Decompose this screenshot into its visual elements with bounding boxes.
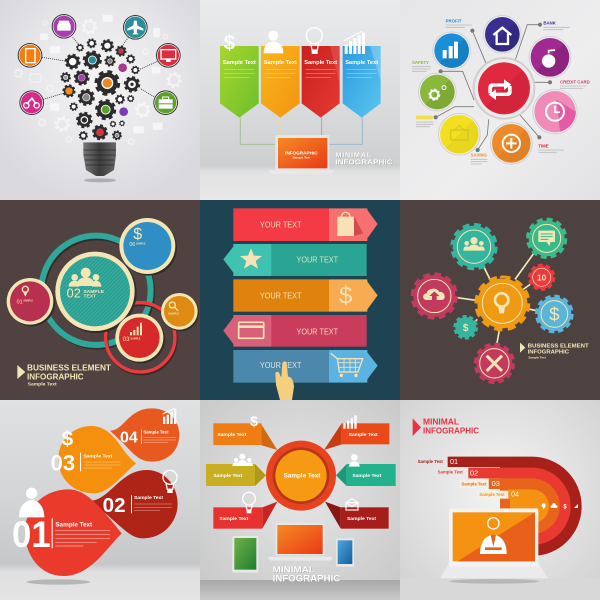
phone bbox=[336, 538, 354, 567]
title: MINIMAL bbox=[423, 418, 459, 427]
banner: orange bbox=[261, 46, 300, 118]
circle: bomb bbox=[529, 36, 571, 79]
laptop: INFOGRAPHIC bbox=[285, 150, 318, 155]
gear: cloud bbox=[413, 275, 456, 317]
title block: Sample Text bbox=[528, 355, 546, 359]
labels: SAFETY bbox=[412, 60, 429, 65]
panel: laptop with bands: Sample Text bbox=[461, 481, 487, 486]
banner: green bbox=[220, 46, 259, 118]
icon: monitor bbox=[156, 43, 181, 68]
drop 04 bbox=[110, 408, 179, 462]
gear: bulb center bbox=[477, 278, 528, 329]
center circle bbox=[473, 57, 535, 120]
title block: BUSINESS ELEMENT bbox=[528, 343, 589, 349]
connector lines bbox=[455, 252, 538, 345]
bar 5 blue bbox=[233, 350, 378, 383]
step 02 text: Sample Text bbox=[134, 495, 163, 501]
panel: business element rings bbox=[0, 200, 200, 400]
circle 06 blue: SAMPLE bbox=[136, 242, 146, 245]
icon: dollar: $ bbox=[250, 413, 258, 429]
laptop bbox=[440, 508, 548, 578]
red ring bbox=[106, 303, 176, 374]
band icons bbox=[542, 503, 578, 510]
circle: clock bbox=[532, 89, 578, 134]
concentric bands bbox=[448, 457, 582, 556]
icon: person bbox=[349, 454, 360, 467]
teal ring bbox=[41, 236, 152, 347]
title bbox=[335, 150, 393, 167]
icon: car bbox=[52, 14, 76, 39]
step 03 text: Sample Text bbox=[83, 453, 113, 459]
icon: bike bbox=[19, 90, 44, 115]
circle 03 red: 03 bbox=[123, 336, 130, 343]
circle 06 blue bbox=[119, 218, 177, 276]
icon: phone bbox=[18, 43, 42, 68]
callout: top right: Sample Text bbox=[349, 432, 378, 438]
hub circle bbox=[266, 441, 336, 511]
band labels: 04 bbox=[511, 489, 519, 498]
title bbox=[273, 565, 341, 584]
band labels: 02 bbox=[470, 468, 478, 477]
circle orange: SAMPLE bbox=[168, 311, 179, 315]
tablet bbox=[232, 536, 258, 573]
title: MINIMAL bbox=[273, 565, 315, 574]
banner: orange: Sample Text bbox=[264, 60, 297, 66]
gear: red badge bbox=[530, 265, 554, 289]
icon: bulb bbox=[243, 492, 255, 513]
circle 06 blue: 06 bbox=[129, 242, 135, 248]
bar 4 pink: YOUR TEXT bbox=[296, 328, 338, 337]
icon: person bbox=[19, 488, 44, 517]
icon: briefcase bbox=[153, 90, 178, 115]
leader lines bbox=[434, 23, 552, 152]
title block: BUSINESS ELEMENT bbox=[27, 363, 111, 373]
circle: gears bbox=[418, 73, 457, 111]
circle 03 red: SAMPLE bbox=[131, 337, 141, 340]
faint background gears and icons bbox=[14, 15, 181, 145]
labels: PROFIT bbox=[446, 19, 462, 24]
labels: SAVING bbox=[471, 153, 488, 158]
callout: bottom right bbox=[325, 502, 389, 529]
gear: message bbox=[528, 220, 565, 257]
icon: bulb bbox=[163, 470, 177, 493]
icon: people bbox=[232, 454, 253, 466]
icon: bar chart bbox=[163, 408, 176, 424]
circle: plus bbox=[490, 122, 533, 165]
icon: dollar: $ bbox=[62, 428, 74, 451]
callout: middle left bbox=[206, 464, 266, 486]
band labels: 03 bbox=[492, 479, 500, 488]
icon: bar chart bbox=[344, 31, 365, 54]
panel: gear network bbox=[400, 200, 600, 400]
step 04 text: Sample Text bbox=[143, 429, 169, 434]
icon: dollar: $ bbox=[224, 31, 236, 54]
gear: red badge: 10 bbox=[537, 272, 547, 282]
gear: small teal bbox=[455, 317, 476, 338]
panel: four banners and laptop bbox=[200, 0, 400, 200]
callout: bottom left bbox=[213, 502, 277, 529]
label backgrounds bbox=[459, 480, 508, 499]
gear: small teal: $ bbox=[463, 323, 469, 334]
hub circle: Sample Text bbox=[284, 473, 321, 480]
laptop: Sample Text bbox=[293, 156, 310, 160]
callout: bottom left: Sample Text bbox=[219, 516, 249, 522]
callout: middle right: Sample Text bbox=[352, 473, 382, 479]
bar 2 teal bbox=[223, 244, 367, 276]
circle 06 blue: $ bbox=[133, 226, 142, 243]
title: INFOGRAPHIC bbox=[423, 427, 479, 436]
circle 02: SAMPLE bbox=[83, 289, 105, 295]
icon: bulb bbox=[306, 28, 322, 54]
labels bbox=[412, 19, 590, 164]
title: INFOGRAPHIC bbox=[273, 574, 341, 584]
title bbox=[413, 418, 479, 436]
step 04 text: 04 bbox=[120, 430, 138, 447]
title block: INFOGRAPHIC bbox=[528, 349, 569, 355]
gear: people bbox=[453, 225, 495, 268]
bulb gears bbox=[61, 39, 139, 140]
title block bbox=[520, 343, 589, 359]
circle 02: TEXT bbox=[83, 294, 96, 300]
callout: middle right bbox=[336, 464, 396, 486]
title block: Sample Text bbox=[28, 382, 57, 388]
panel: teardrop steps bbox=[0, 400, 200, 600]
hand pointer bbox=[275, 361, 294, 400]
panel: laptop with bands: Sample Text bbox=[438, 470, 463, 475]
laptop bbox=[268, 523, 332, 561]
drop 01 bbox=[25, 489, 122, 576]
icon: person bbox=[264, 31, 283, 53]
title: INFOGRAPHIC bbox=[335, 158, 393, 167]
panel: laptop with bands: Sample Text bbox=[418, 459, 443, 464]
banner: blue: Sample Text bbox=[345, 60, 378, 66]
bar 1 red: YOUR TEXT bbox=[260, 220, 302, 229]
step 02 text bbox=[103, 494, 172, 517]
gear: dollar bbox=[537, 297, 572, 331]
panel: light bulb of gears bbox=[0, 0, 200, 200]
circle: home bbox=[483, 15, 522, 54]
step 03 text: 03 bbox=[51, 451, 75, 476]
callout: bottom right: Sample Text bbox=[347, 516, 376, 522]
icon: chart bbox=[343, 415, 357, 429]
bulb base bbox=[83, 142, 116, 182]
title block bbox=[17, 363, 111, 388]
drop 02 bbox=[90, 470, 178, 538]
circle 02 bbox=[55, 252, 137, 333]
panel: laptop with bands bbox=[400, 400, 600, 600]
icon: mail bbox=[346, 499, 358, 510]
labels: TIME bbox=[538, 144, 549, 149]
circle 02: 02 bbox=[67, 287, 81, 301]
bar 3 orange bbox=[233, 279, 378, 312]
band icons: $ bbox=[563, 504, 567, 510]
title block: INFOGRAPHIC bbox=[27, 371, 84, 381]
panel: arrow bars bbox=[200, 200, 400, 400]
callout: middle left: Sample Text bbox=[213, 473, 243, 479]
labels: CREDIT CARD bbox=[560, 80, 590, 85]
band labels: 01 bbox=[450, 457, 458, 466]
circle orange bbox=[161, 293, 199, 331]
bar 4 pink bbox=[223, 315, 367, 347]
step 01 text bbox=[12, 513, 110, 555]
icon: businessman bbox=[480, 518, 507, 554]
gear: dollar: $ bbox=[549, 304, 560, 325]
circle 01 maroon: SAMPLE bbox=[23, 299, 33, 302]
bar 2 teal: YOUR TEXT bbox=[296, 256, 338, 265]
icon: plane bbox=[123, 15, 148, 40]
panel: laptop with bands: Sample Text bbox=[479, 492, 505, 497]
circle: chart bbox=[432, 31, 471, 70]
step 01 text: Sample Text bbox=[55, 521, 93, 528]
bar 5 blue: YOUR TEXT bbox=[260, 361, 302, 370]
bar 3 orange: $ bbox=[339, 282, 352, 309]
bar 3 orange: YOUR TEXT bbox=[260, 291, 302, 300]
circle 01 maroon: 01 bbox=[17, 299, 23, 305]
bar 1 red bbox=[233, 208, 378, 241]
band labels bbox=[450, 457, 519, 498]
step 02 text: 02 bbox=[103, 494, 126, 517]
callout: top left: Sample Text bbox=[217, 432, 247, 438]
labels: BANK bbox=[543, 21, 557, 26]
step 03 text bbox=[51, 451, 121, 476]
banner: red bbox=[302, 46, 340, 118]
banner: red: Sample Text bbox=[304, 60, 337, 66]
panel: circles diagram bbox=[400, 0, 600, 200]
connector lines bbox=[240, 118, 362, 144]
circle 01 maroon bbox=[7, 278, 55, 326]
banner: green: Sample Text bbox=[223, 60, 256, 66]
drop 03 bbox=[58, 426, 136, 493]
laptop bbox=[269, 135, 333, 174]
callout: top left bbox=[213, 423, 277, 450]
circle: cart bbox=[438, 113, 481, 156]
banner: blue bbox=[343, 46, 381, 118]
title: MINIMAL bbox=[335, 150, 372, 159]
gear: tools bbox=[476, 345, 513, 382]
step 01 text: 01 bbox=[12, 513, 51, 555]
callout: top right bbox=[324, 423, 389, 450]
step 04 text bbox=[120, 429, 176, 447]
panel: hub with callouts bbox=[200, 400, 400, 600]
circle 03 red bbox=[115, 314, 165, 363]
dotted connectors bbox=[42, 37, 157, 99]
